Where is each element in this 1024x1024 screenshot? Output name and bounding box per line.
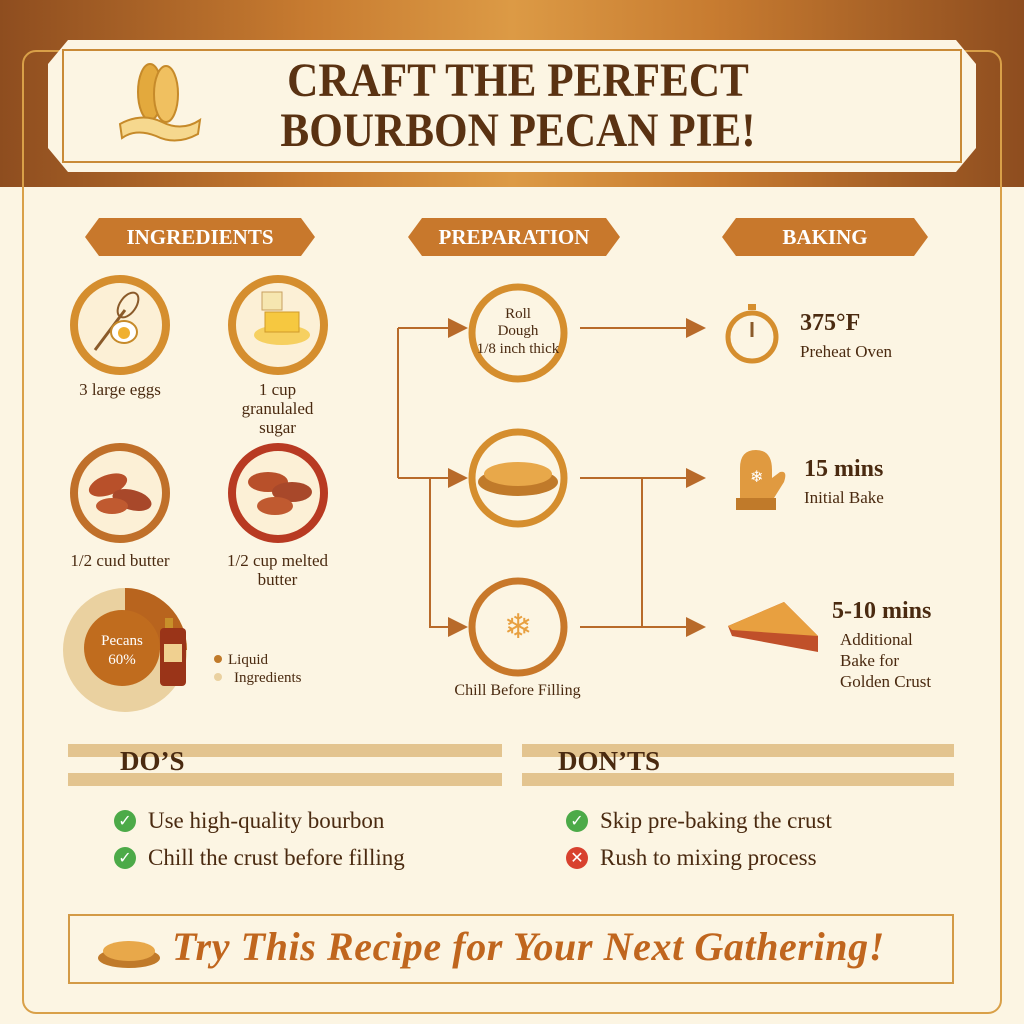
- step: chill: ❄: [504, 607, 532, 647]
- do's panel: ✓: [118, 848, 132, 867]
- baking step 3: additional bake: Golden Crust: [840, 672, 931, 691]
- do's panel: ✓: [118, 811, 132, 830]
- step: roll dough: Roll: [505, 306, 531, 322]
- icon: pecans red ring: [232, 447, 324, 539]
- do's panel: [68, 744, 502, 870]
- icon: pie: [98, 941, 160, 968]
- baking step 2: initial bake: 15 mins: [804, 456, 883, 482]
- donut chart: [63, 588, 187, 712]
- bottom call to action banner: Try This Recipe for Your Next Gathering!: [172, 924, 885, 969]
- title: [281, 64, 752, 146]
- legend: Liquid: [228, 652, 268, 668]
- section heading: preparation: PREPARATION: [439, 225, 589, 249]
- step: roll dough: Dough: [498, 323, 539, 339]
- legend: Ingredients: [234, 670, 302, 686]
- donut chart: Pecans: [101, 633, 143, 649]
- icon: sugar and butter: [232, 279, 324, 371]
- text: 1/2 cuıd butter: [70, 551, 170, 570]
- text: Chill Before Filling: [454, 682, 581, 699]
- baking step 1: preheat oven: [726, 304, 892, 364]
- section heading: preparation: [408, 218, 620, 256]
- baking step 3: additional bake: Bake for: [840, 651, 899, 670]
- title plaque: [48, 40, 976, 172]
- title: BOURBON PECAN PIE!: [280, 104, 756, 157]
- section heading: baking: [722, 218, 928, 256]
- don'ts panel: ✓: [570, 811, 584, 830]
- donut chart: 60%: [108, 652, 136, 668]
- baking step 3: additional bake: 5-10 mins: [832, 598, 931, 624]
- text: sugar: [259, 418, 296, 437]
- step: roll dough: [472, 287, 564, 379]
- ingredient icons: [63, 275, 328, 712]
- step: chill: [472, 581, 564, 673]
- icon: eggs and whisk: [74, 279, 166, 371]
- baking step 2: initial bake: Initial Bake: [804, 488, 884, 507]
- icon: pecan with ribbon: [118, 63, 202, 142]
- section heading: baking: BAKING: [782, 225, 868, 249]
- bottom call to action banner: [68, 914, 954, 984]
- header background band: [0, 0, 1024, 187]
- icon: timer: [726, 304, 778, 364]
- ingredient labels: 3 large eggs: [79, 380, 161, 399]
- title: CRAFT THE PERFECT: [287, 54, 749, 107]
- icon: oven mitt: ❄: [750, 469, 763, 486]
- step: pie: [472, 432, 564, 524]
- do's panel: DO’S: [120, 746, 185, 776]
- section heading: ingredients: [85, 218, 315, 256]
- baking step 3: additional bake: Additional: [840, 630, 913, 649]
- don'ts panel: ✕: [570, 848, 584, 867]
- don'ts panel: [522, 744, 954, 870]
- text: granulaled: [242, 399, 313, 418]
- text: butter: [258, 570, 297, 589]
- icon: oven mitt: [736, 450, 786, 510]
- step: roll dough: 1/8 inch thick: [477, 341, 560, 357]
- section heading: ingredients: INGREDIENTS: [126, 225, 274, 249]
- don'ts panel: Skip pre-baking the crust: [600, 808, 832, 833]
- baking step 3: additional bake: [728, 598, 931, 691]
- do's panel: Use high-quality bourbon: [148, 808, 384, 833]
- do's panel: Chill the crust before filling: [148, 845, 405, 870]
- icon: pecans: [74, 447, 166, 539]
- baking step 2: initial bake: [736, 450, 884, 510]
- baking step 1: preheat oven: Preheat Oven: [800, 342, 892, 361]
- text: 1 cup: [259, 380, 296, 399]
- icon: bourbon bottle: [160, 618, 186, 686]
- don'ts panel: Rush to mixing process: [600, 845, 817, 870]
- text: 1/2 cup melted: [227, 551, 328, 570]
- preparation flow diagram: [397, 284, 706, 676]
- icon: pie slice: [728, 602, 818, 652]
- don'ts panel: DON’TS: [558, 746, 660, 776]
- legend: [214, 652, 302, 686]
- baking step 1: preheat oven: 375°F: [800, 310, 860, 336]
